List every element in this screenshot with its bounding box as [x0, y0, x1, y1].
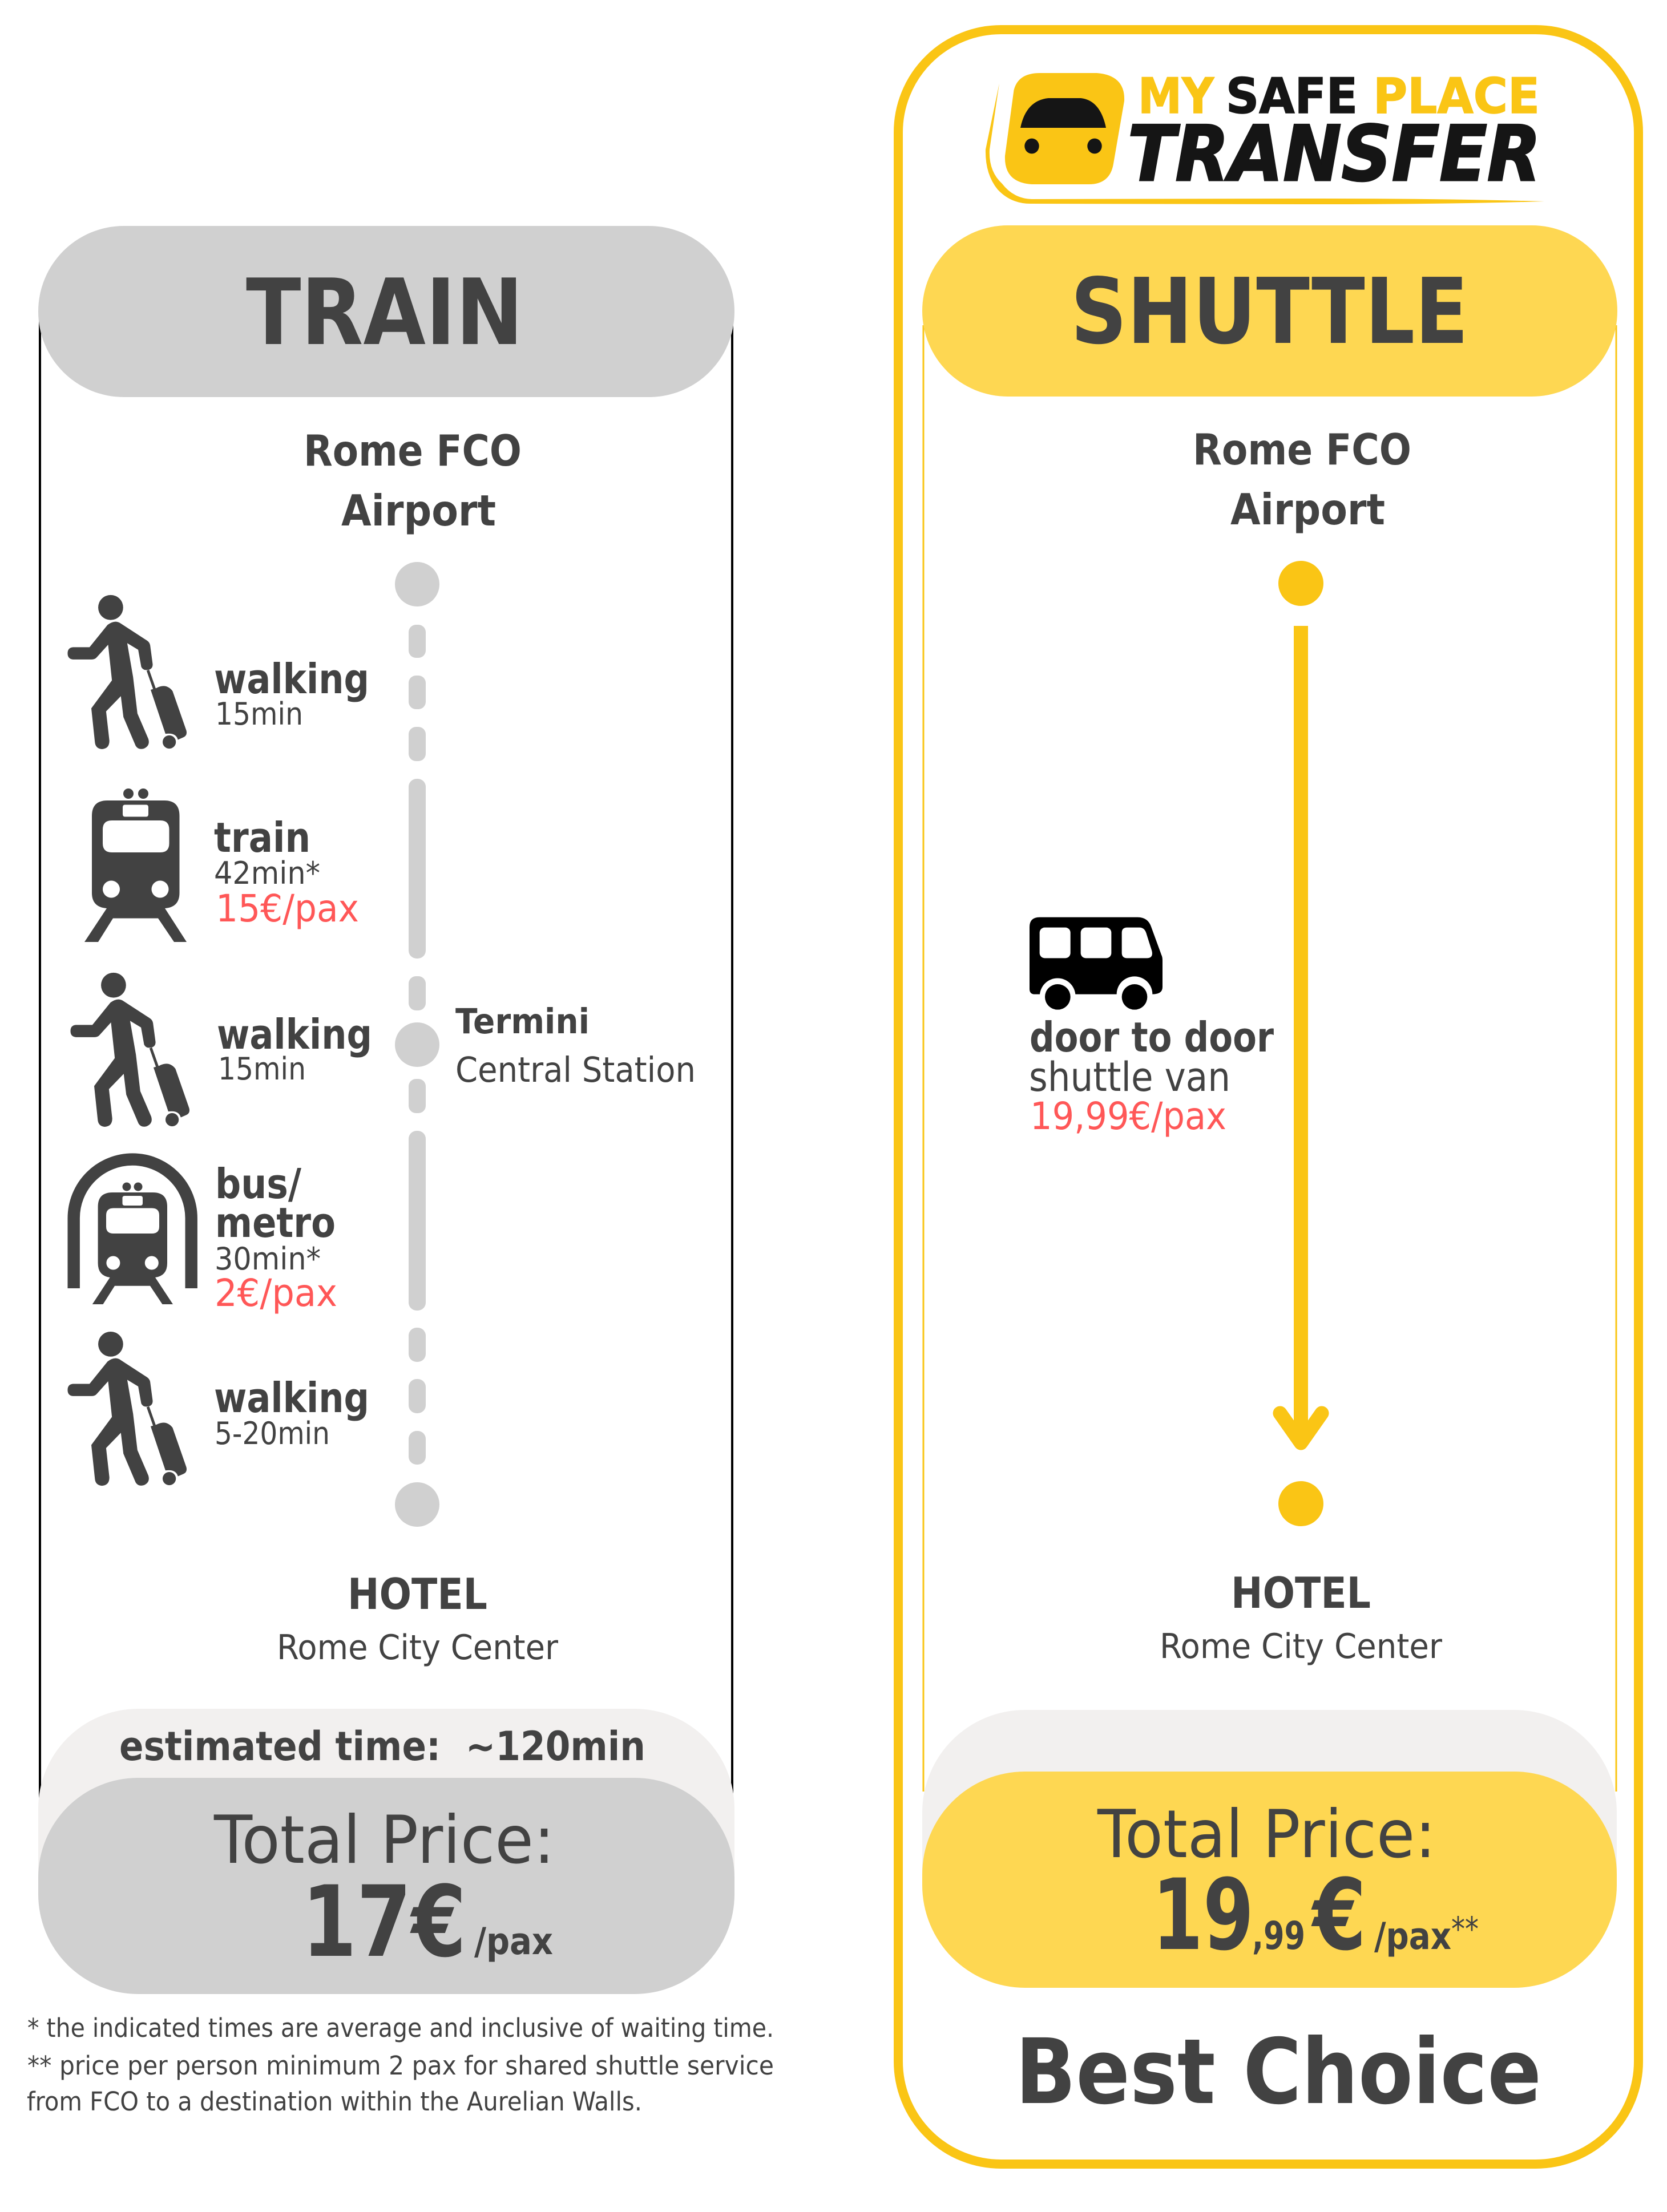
train panel outline	[40, 320, 732, 1809]
total price value: 19,99 euro per pax: **	[1451, 1910, 1479, 1948]
label: bus/metro 30min 2 euro per pax: metro	[215, 1199, 336, 1247]
label: Termini Central Station	[455, 1001, 696, 1090]
origin label: Rome FCO Airport: Airport	[341, 486, 496, 536]
logo: My Safe Place Transfer	[986, 68, 1544, 204]
logo wordmark: MY	[1138, 68, 1215, 125]
total price value: 19,99 euro per pax: 19	[1152, 1858, 1254, 1972]
label: walking 5-20min: 5-20min	[215, 1416, 330, 1451]
panel: train	[38, 226, 734, 1994]
icon: walking traveller 3	[67, 1332, 187, 1486]
total price value: 17 euro per pax: 17€	[302, 1865, 466, 1979]
label: Termini Central Station: Central Station	[455, 1050, 696, 1090]
origin label: Rome FCO Airport	[304, 426, 522, 536]
total price pill	[922, 1772, 1617, 1988]
total price pill	[38, 1778, 734, 1994]
shuttle inner outline	[923, 325, 1616, 1792]
heading: SHUTTLE: SHUTTLE	[1071, 259, 1468, 365]
label: train 42min 15 euro per pax	[214, 814, 359, 931]
total price value: 19,99 euro per pax: ,99	[1252, 1914, 1305, 1959]
total price label: Total Price:	[213, 1802, 555, 1879]
logo car icon	[1005, 73, 1124, 184]
footnotes: ** price per person minimum 2 pax for shared shuttle service	[27, 2051, 774, 2081]
destination label: Hotel Rome City Center: HOTEL	[1231, 1568, 1371, 1618]
footnotes	[27, 2013, 774, 2117]
destination label: Hotel Rome City Center	[277, 1569, 558, 1668]
label: door to door shuttle van price	[1029, 1013, 1274, 1138]
destination label: Hotel Rome City Center: HOTEL	[348, 1569, 487, 1619]
origin label: Rome FCO Airport	[1193, 424, 1411, 535]
logo wordmark: SAFE	[1226, 68, 1358, 125]
label: Termini Central Station: Termini	[455, 1001, 590, 1042]
logo wordmark: PLACE	[1373, 68, 1540, 125]
origin label: Rome FCO Airport: Rome FCO	[304, 426, 522, 476]
label: walking 15min second leg	[217, 1010, 372, 1087]
destination label: Hotel Rome City Center	[1160, 1568, 1442, 1667]
label: walking 5-20min: walking	[214, 1374, 369, 1422]
total price label: Total Price:	[1097, 1796, 1436, 1873]
label: walking 15min	[214, 655, 369, 732]
shuttle header pill	[922, 225, 1617, 397]
footnotes: from FCO to a destination within the Aurelian Walls.	[27, 2086, 642, 2117]
heading: TRAIN: TRAIN	[246, 259, 523, 366]
icon: metro train in tunnel	[74, 1159, 191, 1304]
route line: train dashes and stops	[395, 562, 439, 1527]
destination label: Hotel Rome City Center: Rome City Center	[1160, 1627, 1442, 1667]
total price value: 19,99 euro per pax: /pax	[1374, 1915, 1451, 1958]
total price value: 19,99 euro per pax	[1152, 1858, 1479, 1972]
label: bus/metro 30min 2 euro per pax: bus/	[215, 1160, 302, 1208]
icon: walking traveller 1	[67, 595, 187, 749]
label: train 42min 15 euro per pax: 42min*	[214, 855, 320, 891]
origin label: Rome FCO Airport: Airport	[1230, 484, 1385, 535]
background pill behind total price	[922, 1710, 1617, 1978]
label: bus/metro 30min 2 euro per pax: 2€/pax	[215, 1271, 337, 1315]
total price value: 17 euro per pax: /pax	[474, 1920, 553, 1963]
label: walking 15min: 15min	[215, 696, 303, 732]
label: door to door shuttle van price: 19,99€/pax	[1030, 1094, 1226, 1138]
logo wordmark: TRANSFER	[1128, 110, 1541, 199]
label: train 42min 15 euro per pax: 15€/pax	[216, 887, 359, 931]
route arrow: shuttle direct	[1278, 561, 1323, 1526]
label: walking 15min second leg: walking	[217, 1010, 372, 1058]
label: train 42min 15 euro per pax: train	[214, 814, 310, 862]
logo swoosh	[986, 83, 1544, 204]
shuttle outer frame	[898, 30, 1638, 2164]
label: walking 15min second leg: 15min	[218, 1051, 306, 1087]
icon: walking traveller 2	[70, 973, 189, 1127]
label: walking 15min: walking	[214, 655, 369, 703]
total price value: 19,99 euro per pax: €	[1311, 1858, 1366, 1972]
label: walking 5-20min	[214, 1374, 369, 1451]
label: door to door shuttle van price: shuttle van	[1029, 1054, 1230, 1101]
label: door to door shuttle van price: door to door	[1030, 1013, 1274, 1061]
callout: Best Choice: Best Choice	[1015, 2020, 1541, 2125]
icon: shuttle van	[1030, 917, 1163, 1010]
footnotes: * the indicated times are average and inclusive of waiting time.	[27, 2013, 774, 2043]
estimated time text: estimated time: ~120min	[119, 1723, 645, 1770]
train header pill	[38, 226, 734, 397]
logo wordmark	[1128, 68, 1541, 199]
label: bus/metro 30min 2 euro per pax	[215, 1160, 337, 1315]
destination label: Hotel Rome City Center: Rome City Center	[277, 1628, 558, 1668]
label: bus/metro 30min 2 euro per pax: 30min*	[215, 1241, 321, 1277]
panel: shuttle	[898, 30, 1638, 2164]
estimated time pill	[38, 1709, 734, 1977]
icon: train	[84, 788, 187, 942]
origin label: Rome FCO Airport: Rome FCO	[1193, 424, 1411, 475]
